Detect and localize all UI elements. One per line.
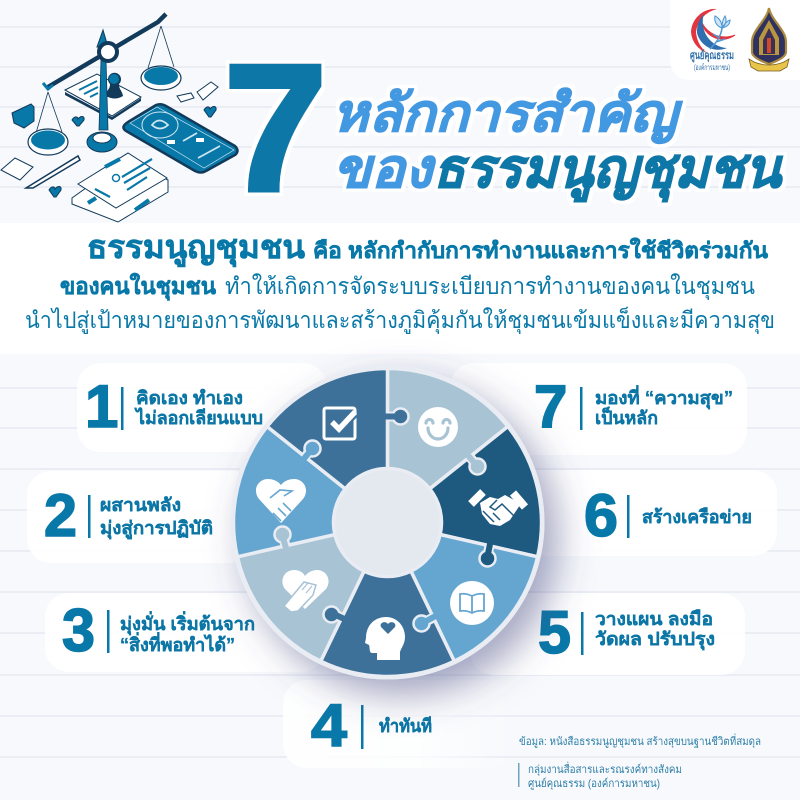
card 1: ไม่ลอกเลียนแบบ [134, 407, 263, 428]
title: line one: หลักการสำคัญ [332, 85, 683, 144]
card 2: มุ่งสู่การปฏิบัติ [100, 518, 213, 540]
card 2: ผสานพลัง [100, 495, 181, 515]
card 7: มองที่ “ความสุข” [595, 385, 733, 410]
text: definition line one [87, 229, 768, 268]
card 1 [77, 363, 327, 452]
icon: hands over heart [282, 570, 329, 612]
card 3: “สิ่งที่พอทำได้” [120, 632, 235, 655]
text: definition line one: คือ หลักกำกับการทำงานและการใช้ชีวิตร่วมกัน [313, 237, 768, 263]
card 7: 7 [534, 373, 567, 440]
segment 6 [414, 426, 583, 596]
icon: document stack [72, 153, 168, 222]
card 4 [283, 680, 515, 768]
card 3: 3 [62, 597, 95, 664]
title: line two: ของ [333, 139, 437, 199]
card 4: ทำทันที [379, 716, 432, 736]
credit [518, 761, 682, 790]
panel: logos [670, 0, 800, 80]
card 6 [480, 470, 777, 556]
text: definition line two: ทำให้เกิดการจัดระบบระเบียบการทำงานของคนในชุมชน [225, 273, 755, 300]
logo: moral center: ศูนย์คุณธรรม [690, 49, 734, 63]
credit: ศูนย์คุณธรรม (องค์การมหาชน) [528, 777, 660, 790]
illustration: scales and documents [1, 14, 238, 222]
text: definition line two [60, 272, 755, 301]
icon: pen [26, 156, 80, 188]
text: definition line one: ธรรมนูญชุมชน [87, 229, 305, 268]
icon: book [450, 581, 494, 625]
icon: heart with handshake [256, 479, 306, 523]
card 7 [450, 363, 747, 455]
card 5: วางแผน ลงมือ [595, 609, 713, 629]
title: number 7: 7 [224, 28, 327, 229]
segment 4 [294, 553, 454, 713]
icon: balance scale [28, 14, 181, 155]
card 6: สร้างเครือข่าย [642, 507, 752, 527]
card 3: มุ่งมั่น เริ่มต้นจาก [120, 611, 255, 636]
card 1: คิดเอง ทำเอง [136, 388, 243, 408]
icon: checkbox [324, 408, 355, 439]
card 3 [45, 593, 325, 672]
panel: definition [0, 223, 800, 354]
source note: ข้อมูล: หนังสือธรรมนูญชุมชน สร้างสุขบนฐานชีวิตที่สมดุล [519, 733, 761, 748]
puzzle knobs [274, 408, 496, 632]
segment 5 [394, 530, 538, 674]
icon: smile [418, 407, 458, 447]
card 1: 1 [85, 373, 118, 440]
card 7: เป็นหลัก [595, 406, 658, 428]
segment 1 [267, 332, 436, 501]
icon: stamp and paper [65, 73, 141, 120]
icon: phone [123, 104, 238, 172]
card 5: 5 [538, 599, 571, 666]
card 2 [27, 471, 307, 563]
card 5: วัดผล ปรับปรุง [595, 629, 715, 651]
segment 2 [211, 413, 355, 557]
card 4: 4 [311, 692, 348, 759]
logo: emblem [749, 8, 789, 71]
segment 3 [212, 501, 373, 661]
icon: handshake [471, 492, 525, 526]
icon: small items [1, 82, 218, 197]
credit: กลุ่มงานสื่อสารและรณรงค์ทางสังคม [528, 761, 682, 776]
logo: moral center [690, 9, 735, 72]
icon: head with heart [365, 617, 405, 660]
card 2: 2 [44, 482, 77, 549]
puzzle wheel [211, 332, 583, 713]
card 5 [470, 593, 745, 675]
title: line two: ธรรมนูญชุมชน [433, 139, 783, 202]
card 6: 6 [584, 482, 618, 549]
text: definition line two: ของคนในชุมชน [60, 272, 216, 301]
logo: moral center: (องค์การมหาชน) [694, 62, 730, 72]
segment 7 [388, 368, 508, 489]
